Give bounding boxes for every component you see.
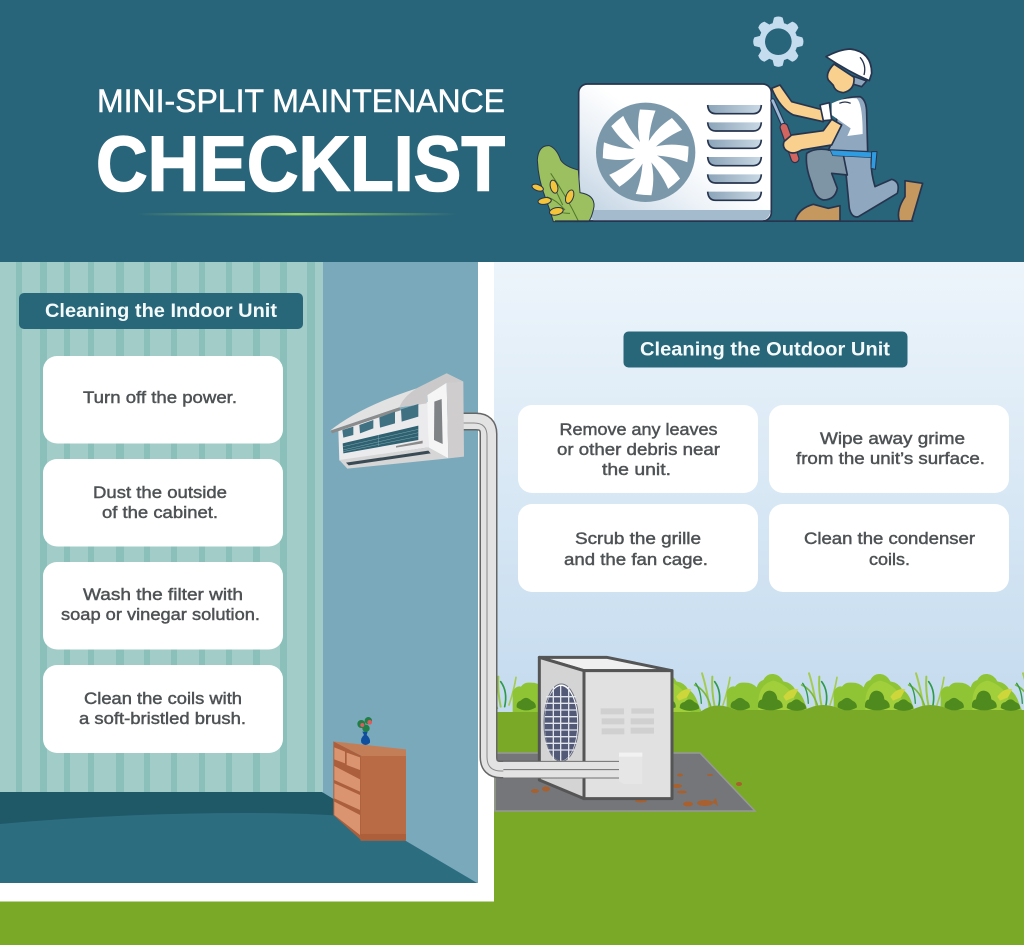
white wall frame bbox=[0, 262, 494, 902]
title: MINI-SPLIT MAINTENANCE bbox=[97, 83, 505, 119]
card: turn off power bbox=[43, 356, 283, 444]
lawn bbox=[0, 705, 1024, 945]
header illustration: technician servicing unit bbox=[531, 16, 923, 222]
card: condenser coils: Clean the condenser bbox=[804, 530, 976, 548]
fan bbox=[596, 103, 695, 202]
card: wipe grime: from the unit’s surface. bbox=[796, 450, 985, 468]
panel: side wall bbox=[323, 262, 478, 884]
card: wash filter: Wash the filter with bbox=[83, 586, 243, 604]
panel: outdoor sky bbox=[494, 262, 1024, 722]
title bbox=[96, 83, 505, 215]
card: remove leaves: Remove any leaves bbox=[560, 421, 718, 439]
card: scrub grille: and the fan cage. bbox=[564, 551, 708, 569]
heading: indoor: Cleaning the Indoor Unit bbox=[45, 300, 278, 322]
card: wash filter bbox=[43, 562, 283, 650]
card: clean coils: Clean the coils with bbox=[84, 690, 242, 708]
header band bbox=[0, 0, 1024, 262]
card: wipe grime: Wipe away grime bbox=[820, 430, 965, 448]
heading: indoor bbox=[19, 293, 303, 329]
card: dust cabinet: of the cabinet. bbox=[102, 504, 218, 522]
card: wash filter: soap or vinegar solution. bbox=[61, 606, 260, 624]
card: scrub grille bbox=[518, 504, 758, 592]
card: dust cabinet bbox=[43, 459, 283, 546]
refrigerant pipe bbox=[462, 422, 622, 771]
vase bbox=[361, 732, 370, 745]
floor bbox=[0, 792, 478, 884]
card: turn off power: Turn off the power. bbox=[83, 389, 237, 407]
card: remove leaves: or other debris near bbox=[557, 441, 721, 459]
hedge back row bbox=[498, 672, 1024, 712]
card: clean coils: a soft-bristled brush. bbox=[79, 710, 246, 728]
concrete pad with leaves bbox=[495, 753, 755, 811]
ground line bbox=[555, 220, 913, 222]
heading: outdoor bbox=[624, 332, 908, 368]
outdoor condenser unit bbox=[503, 657, 672, 799]
indoor wall unit bbox=[330, 373, 464, 469]
card: condenser coils bbox=[769, 504, 1009, 592]
panel: indoor wall with stripes bbox=[0, 262, 323, 794]
title: CHECKLIST bbox=[96, 120, 505, 208]
vents bbox=[708, 105, 761, 200]
cabinet with vase bbox=[333, 717, 406, 841]
card: remove leaves bbox=[518, 405, 758, 493]
heading: outdoor: Cleaning the Outdoor Unit bbox=[640, 338, 891, 360]
plant bbox=[531, 146, 594, 222]
card: dust cabinet: Dust the outside bbox=[93, 484, 227, 502]
technician bbox=[772, 49, 923, 221]
card: condenser coils: coils. bbox=[869, 551, 910, 569]
card: wipe grime bbox=[769, 405, 1009, 493]
gear bbox=[753, 16, 803, 67]
card: remove leaves: the unit. bbox=[602, 461, 671, 479]
outdoor unit and plant icon bbox=[531, 16, 913, 222]
card: scrub grille: Scrub the grille bbox=[575, 530, 701, 548]
card: clean coils bbox=[43, 665, 283, 753]
hedge front bushes bbox=[516, 690, 1020, 711]
